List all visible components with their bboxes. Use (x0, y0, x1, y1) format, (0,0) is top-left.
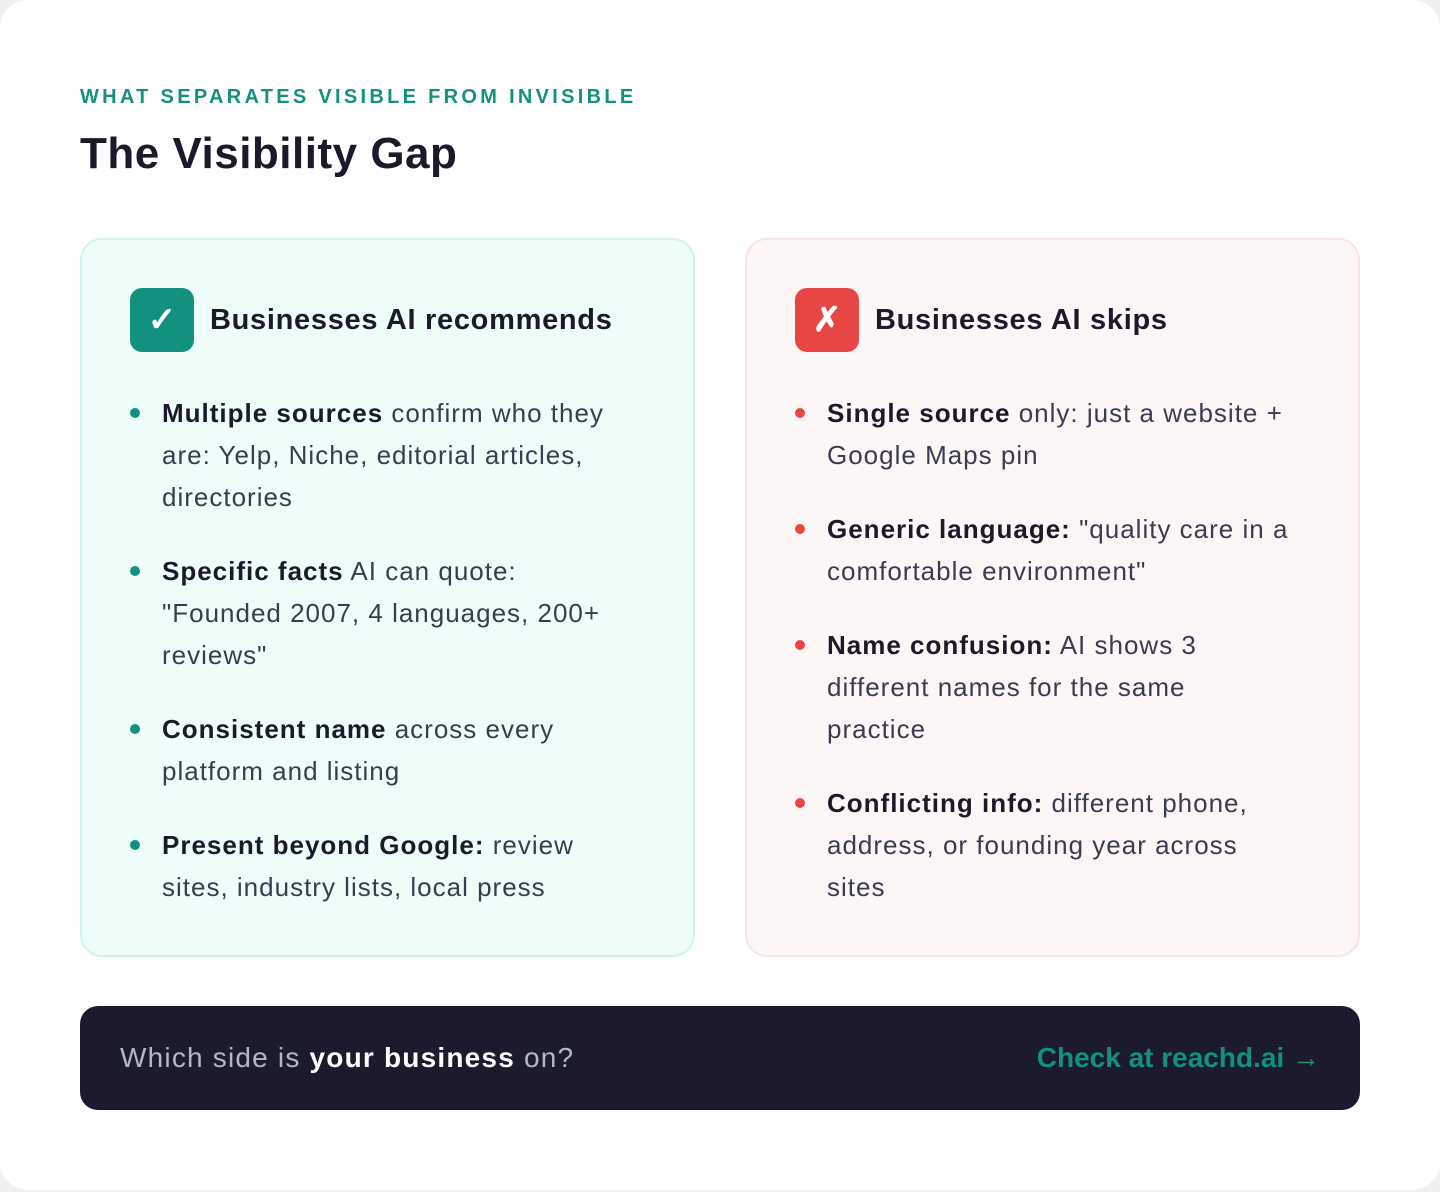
bullet list: practice (827, 714, 926, 744)
cta bar (80, 1006, 1360, 1110)
icon: check (130, 288, 194, 352)
bullet list: Present beyond Google: review sites, industry lists, local press (162, 830, 574, 902)
bullet list: Multiple sources confirm who they are: Yelp, Niche, editorial articles, directories (162, 398, 604, 512)
panel heading: Businesses AI recommends (210, 304, 613, 336)
bullet list (795, 398, 1288, 902)
bullet list: Single source only: just a website + Google Maps pin (827, 398, 1283, 470)
panel: skips (745, 238, 1360, 957)
icon: cross: ✗ (813, 301, 841, 339)
bullet list: Consistent name across every platform and listing (162, 714, 554, 786)
bullet list: Specific facts AI can quote: "Founded 2007, 4 languages, 200+ reviews" (162, 556, 600, 670)
kicker: WHAT SEPARATES VISIBLE FROM INVISIBLE (80, 86, 637, 108)
icon: cross (795, 288, 859, 352)
cta link: Check at reachd.ai → (1037, 1042, 1320, 1073)
title: The Visibility Gap (80, 129, 457, 178)
question: Which side is your business on? (120, 1042, 574, 1073)
bullet list (130, 398, 604, 902)
bullet list: Generic language: "quality care in a comfortable environment" (827, 514, 1288, 586)
bullet list: Conflicting info: different phone, address, or founding year across sites (827, 788, 1248, 902)
icon: check: ✓ (148, 301, 176, 339)
panel heading: Businesses AI skips (875, 304, 1168, 336)
bullet list: Name confusion: AI shows 3 different names for the same (827, 630, 1197, 702)
panel: recommends (80, 238, 695, 957)
